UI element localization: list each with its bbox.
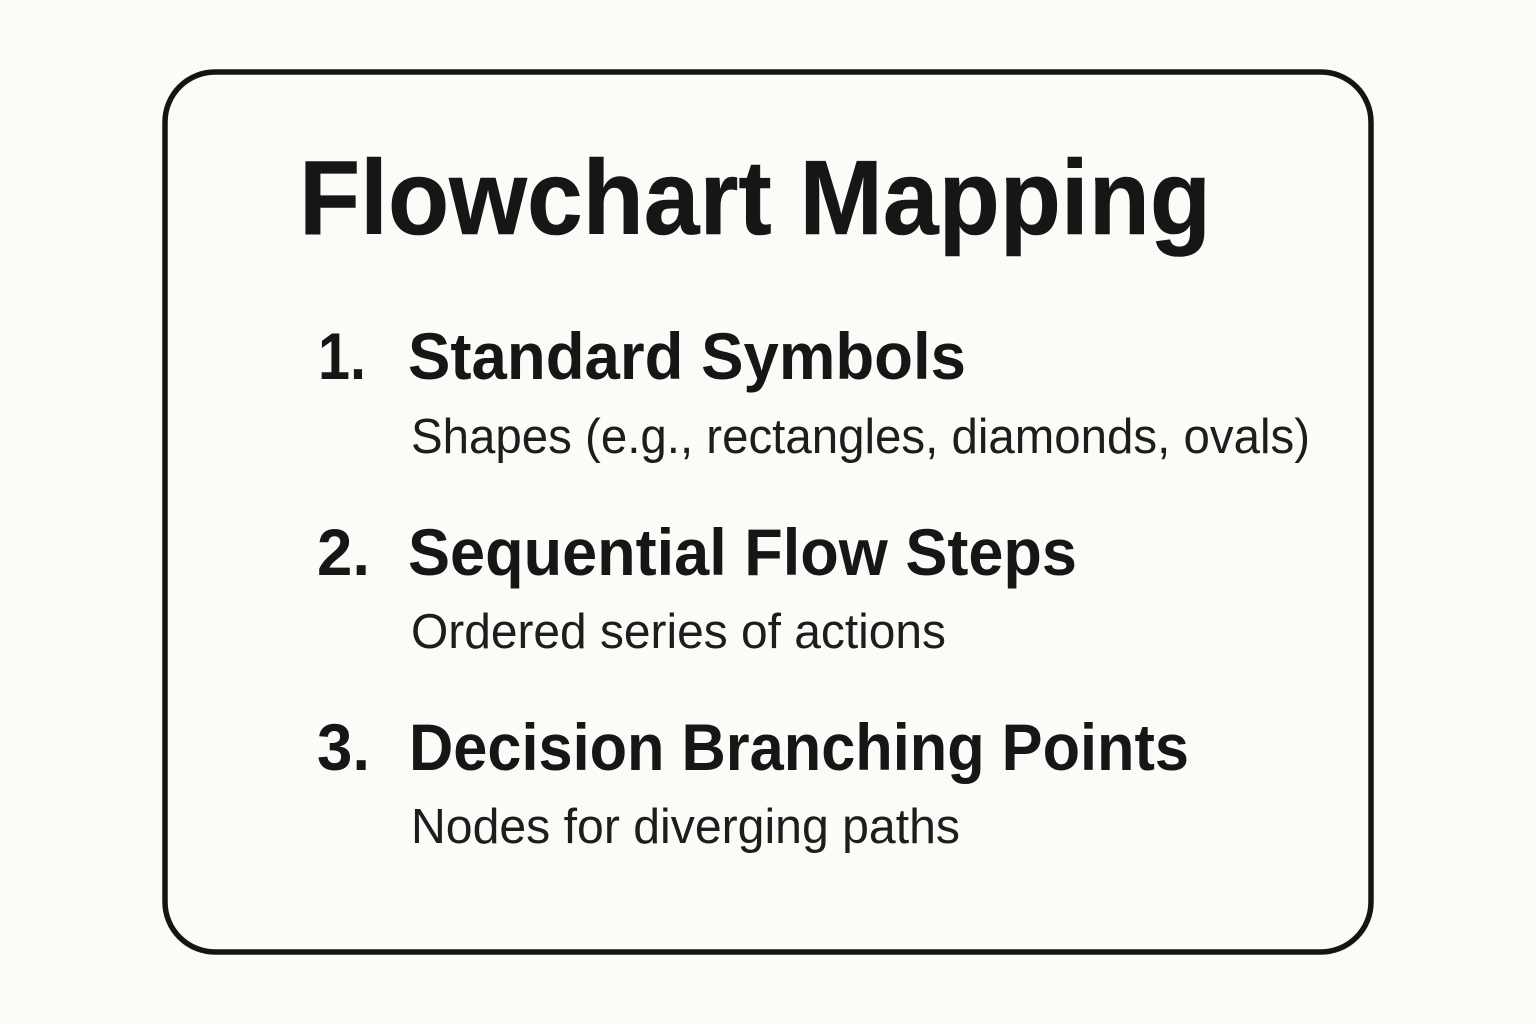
item 3: decision branching points: Decision Branching Points — [409, 710, 1189, 784]
item 2: sequential flow steps — [317, 515, 1077, 659]
item 1: standard symbols — [318, 319, 1310, 464]
item 1: standard symbols: Standard Symbols — [408, 319, 966, 393]
item 3: decision branching points: 3. — [317, 710, 370, 784]
item 2: sequential flow steps: Sequential Flow Steps — [408, 515, 1077, 589]
panel: flowchart mapping card — [165, 72, 1371, 952]
item 3: decision branching points — [317, 710, 1189, 854]
item 3: decision branching points: Nodes for diverging paths — [411, 800, 960, 854]
title: Flowchart Mapping — [299, 139, 1211, 257]
item 1: standard symbols: 1. — [318, 319, 366, 393]
item 2: sequential flow steps: Ordered series of actions — [411, 605, 946, 659]
item 1: standard symbols: Shapes (e.g., rectangles, diamonds, ovals) — [411, 410, 1310, 464]
item 2: sequential flow steps: 2. — [317, 515, 370, 589]
